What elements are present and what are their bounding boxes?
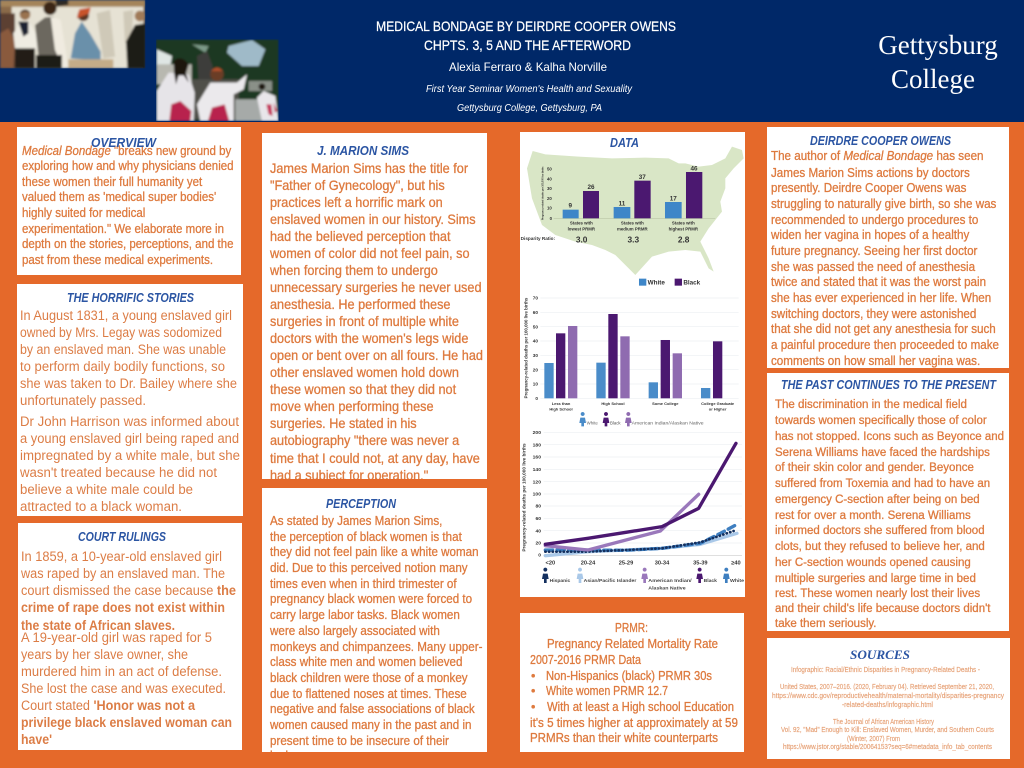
PRMR bullets: • [531,669,535,683]
Sims text: time that I could not, at any day, have [270,451,480,466]
Sims text: had a subject for operation." [270,468,429,483]
PRMR bullets [530,653,738,745]
horrific stories text: unfortunately passed. [20,393,146,408]
chart: PRMR by age: 35-39 [693,560,708,566]
horrific stories text: wasn't treated because he did not [19,465,217,480]
chart: PRMR by state group over US map: highest PRMR [669,227,699,232]
horrific stories text: attracted to a black woman. [20,499,182,514]
panel: data [520,132,745,597]
past continues text: her C-section wounds opened causing [775,556,971,569]
court rulings text: court dismissed the case because the [21,583,236,598]
chart: PRMR by state group over US map: States with [621,221,644,226]
source citations: (Winter, 2007) From [847,734,900,743]
PRMR bullets: With at least a High school Education [547,700,734,714]
past continues text: take them seriously. [775,617,876,630]
court rulings text: have' [21,732,52,747]
court rulings text: Court stated 'Honor was not a [21,698,195,713]
Sims text: women of color did not feel pain, so [269,246,470,261]
chart: PRMR by age: 30-34 [655,560,670,566]
chart: PRMR by education: 50 [533,324,538,329]
Deirdre text: struggling to naturally give birth, so she was [771,197,996,211]
perception text: pregnancy black women were forced to [270,592,472,606]
chart: PRMR by age: Asian/Pacific Islander [584,578,637,583]
chart: PRMR by age: American Indian/ [648,578,693,583]
chart: PRMR by age: 20 [535,541,541,547]
chart: PRMR by state group over US map: 9 [569,203,573,210]
past continues text: clots, but they refused to believe her, and [775,540,985,553]
title [376,18,676,53]
panel: court rulings [18,523,242,750]
horrific stories text: believe a white male could be [20,482,193,497]
court rulings text: privilege black enslaved woman can [21,715,232,730]
past continues text: rest for over a month. Serena Williams [775,509,971,522]
chart: PRMR by age: White [730,578,745,583]
past continues text: and their child's life because doctors didn't [775,602,991,615]
court rulings text: was raped by an enslaved man. The [20,566,225,581]
photo: painting of surgery [0,0,145,68]
perception text: monkeys and chimpanzees. Many upper- [270,640,482,654]
heading: overview: OVERVIEW [91,135,158,150]
Sims text: doctors with the women's legs wide [270,331,468,346]
chart: PRMR by education: Pregnancy-related deaths per 100,000 live births [524,297,529,398]
logo: Gettysburg College: College [891,64,975,94]
Sims text: surgeries in front of multiple white [270,314,459,329]
chart: PRMR by age: Alaskan Native [648,585,686,590]
chart: PRMR by state group over US map: Black [683,279,701,286]
PRMR bullets: 2007-2016 PRMR Data [530,653,641,667]
PRMR definition: Pregnancy Related Mortality Rate [547,637,718,651]
Sims text: unnecessary surgeries he never used [270,280,482,295]
chart: PRMR by education: High School [549,407,573,412]
chart: PRMR by age: ≥40 [731,560,741,566]
Deirdre text: she was passed the need of anesthesia [771,260,975,274]
title: CHPTS. 3, 5 AND THE AFTERWORD [424,37,631,53]
chart: PRMR by age: Black [704,578,718,583]
chart: PRMR by state group over US map: 30 [547,186,552,191]
chart: PRMR by age: 20-24 [581,560,596,566]
panel: J. Marion Sims [258,133,492,488]
perception text: did. Due to this perceived notion many [270,561,468,575]
chart: PRMR by age: 140 [533,467,541,473]
overview text: these women their full humanity yet [22,174,203,189]
court rulings text: A 19-year-old girl was raped for 5 [21,630,212,645]
authors and affiliation: Alexia Ferraro & Kalha Norville [449,60,607,74]
chart: PRMR by education: Black [610,420,621,425]
panel: perception [258,488,492,768]
chart: PRMR by state group over US map: medium PRMR [617,227,648,232]
chart: PRMR by education: 20 [533,367,538,372]
panel: the horrific stories [17,284,243,516]
chart: PRMR by age: 100 [533,492,541,498]
horrific stories text: she was taken to Dr. Bailey where she [20,376,237,391]
chart: PRMR by education: 60 [533,310,538,315]
title: MEDICAL BONDAGE BY DEIRDRE COOPER OWENS [376,18,676,34]
PRMR definition [547,621,718,651]
court rulings text: crime of rape does not exist within [21,600,225,615]
chart: PRMR by age: 180 [533,442,541,448]
heading: sources: SOURCES [850,647,910,662]
PRMR bullets: it's 5 times higher at approximately at 59 [530,716,738,730]
chart: PRMR by state group over US map: 37 [639,174,646,181]
Sims text [269,161,483,483]
perception text: carry large labor tasks. Black women [270,608,460,622]
panel: Deirdre Cooper Owens [767,127,1009,368]
horrific stories text: In August 1831, a young enslaved girl [20,308,232,323]
horrific stories text: impregnated by a white male, but she [20,448,240,463]
Sims text: anesthesia. He performed these [270,297,450,312]
Sims text: autobiography "there was never a [270,433,460,448]
photo: reenactment protest [156,39,279,121]
chart: PRMR by education: Some College [652,401,679,406]
chart: PRMR by state group over US map: 17 [670,195,677,202]
perception text: present time to be insecure of their [270,734,449,748]
court rulings text: In 1859, a 10-year-old enslaved girl [21,549,222,564]
panel: sources [767,638,1010,759]
chart: PRMR by age: Hispanic [550,578,571,583]
chart: PRMR by education: High School [601,401,625,406]
Sims text: when forcing them to undergo [269,263,438,278]
horrific stories text: a young enslaved girl being raped and [20,431,239,446]
source citations [772,665,1004,751]
perception text: the perception of black women is that [270,530,462,544]
chart: PRMR by education: 0 [535,396,538,401]
Sims text: had the believed perception that [270,229,451,244]
PRMR definition: PRMR: [615,621,648,635]
chart: PRMR by state group over US map: 40 [547,176,552,181]
court rulings text: murdered him in an act of defense. [21,664,222,679]
chart: PRMR by state group over US map: Pregnancy-related deaths per 100,000 live births [541,166,544,220]
perception text: they did not feel pain like a white woman [270,545,479,559]
chart: PRMR by education: White [587,420,598,425]
PRMR bullets: PRMRs than their white counterparts [530,731,718,745]
chart: PRMR by education: 10 [533,382,538,387]
overview text: highly suited for medical [22,205,145,220]
chart: PRMR by state group over US map: 3.3 [628,234,639,244]
Sims text: enslaved women in our history. Sims [270,212,476,227]
logo: Gettysburg College [878,30,998,94]
Deirdre text: she has ever experienced in her life. When [771,291,991,305]
past continues text: emergency C-section after being on bed [775,493,980,506]
chart: PRMR by age: 200 [533,430,541,436]
perception text [269,514,482,763]
horrific stories text: to perform daily bodily functions, so [20,359,225,374]
chart: PRMR by age: Pregnancy-related deaths per 100,000 live births [522,443,527,552]
perception text: As stated by James Marion Sims, [270,514,442,528]
heading: J. Marion Sims: J. MARION SIMS [317,143,409,158]
panel: overview [17,127,241,275]
Deirdre text [770,149,999,368]
chart: PRMR by education: Less than [552,401,571,406]
chart: PRMR by age: <20 [546,560,555,566]
past continues text: rest. These women nearly lost their lives [775,587,980,600]
Sims text: these women so that they did not [270,382,456,397]
chart: PRMR by state group over US map: 46 [690,165,698,172]
perception text: negative and false associations of black [270,702,476,716]
source citations: The Journal of African American History [833,717,934,726]
chart: PRMR by state group over US map: 20 [547,196,552,201]
overview text [22,143,234,267]
PRMR bullets: White women PRMR 12.7 [546,684,668,698]
source citations: -related-deaths/infographic.html [842,700,933,709]
chart: PRMR by state group over US map: 50 [547,166,552,171]
panel: PRMR [520,613,744,752]
Deirdre text: The author of Medical Bondage has seen [771,149,983,163]
past continues text: informed doctors she suffered from blood [775,524,985,537]
Deirdre text: presently. Deirdre Cooper Owens was [771,181,966,195]
chart: PRMR by age: 160 [533,455,541,461]
Sims text: other enslaved women hold down [270,365,459,380]
chart: PRMR by state group over US map: 3.0 [576,234,588,244]
Deirdre text: switching doctors, they were astonished [771,307,976,321]
Sims text: "Father of Gynecology", but his [270,178,445,193]
Sims text: James Marion Sims has the title for [270,161,469,176]
Sims text: move when performing these [270,399,434,414]
Sims text: practices left a horrific mark on [270,195,443,210]
horrific stories text [19,308,240,514]
perception text: were also largely associated with [269,624,440,638]
horrific stories text: owned by Mrs. Legay was sodomized [20,325,222,340]
Deirdre text: twice and stated that it was the worst pain [771,275,986,289]
perception text: looks. [270,749,300,763]
past continues text: of their skin color and gender. Beyonce [775,461,974,474]
chart: PRMR by education [524,296,739,426]
court rulings text: the state of African slaves. [21,618,175,633]
logo: Gettysburg College: Gettysburg [878,30,998,60]
heading: court rulings: COURT RULINGS [78,529,166,544]
perception text: women caused many in the past and in [269,718,471,732]
Deirdre text: recommended to undergo procedures to [771,213,979,227]
past continues text: Serena Williams have faced the hardships [775,446,990,459]
chart: PRMR by age: 80 [535,504,541,510]
chart: PRMR by state group over US map: 2.8 [678,234,690,244]
past continues text: suffered from Toxemia and had to have an [775,477,990,490]
source citations: https://www.jstor.org/stable/20064153?seq=6#metadata_info_tab_contents [783,742,992,751]
perception text: black children were those of a monkey [270,671,468,685]
chart: PRMR by education: 40 [533,339,538,344]
Deirdre text: James Marion Sims actions by doctors [771,166,970,180]
chart: PRMR by age: 25-29 [619,560,633,566]
heading: Deirdre Cooper Owens: DEIRDRE COOPER OWENS [810,133,951,148]
chart: PRMR by state group over US map: 10 [547,206,552,211]
overview text: exploring how and why physicians denied [22,158,234,173]
chart: PRMR by age: 40 [535,528,541,534]
chart: PRMR by state group over US map: 0 [550,216,553,221]
Sims text: open or bent over on all fours. He had [270,348,483,363]
Deirdre text: that she did not get any anesthesia for such [771,322,996,336]
PRMR bullets: Non-Hispanics (black) PRMR 30s [546,669,712,683]
chart: PRMR by state group over US map: White [648,279,665,286]
court rulings text: years by her slave owner, she [21,647,188,662]
Deirdre text: widen her vagina in hopes of a healthy [770,228,969,242]
Deirdre text: future pregnancy. Seeing her first doctor [771,244,977,258]
chart: PRMR by age: 0 [538,553,541,559]
court rulings text: She lost the case and was executed. [21,681,226,696]
authors and affiliation: First Year Seminar Women's Health and Sexuality [426,84,633,95]
overview text: Medical Bondage "breaks new ground by [22,143,232,158]
PRMR bullets: • [531,700,535,714]
perception text: times even when in third trimester of [270,577,457,591]
chart: PRMR by state group over US map: 26 [587,184,595,191]
overview text: valued them as 'medical super bodies' [22,189,216,204]
horrific stories text: by an enslaved man. She was unable [20,342,226,357]
chart: PRMR by education: or Higher [709,407,727,412]
Sims text: surgeries. He stated in his [270,416,417,431]
heading: data: DATA [610,135,639,150]
overview text: past from these medical experiments. [22,252,213,267]
overview text: experimentation." We elaborate more in [22,221,224,236]
authors and affiliation: Gettysburg College, Gettysburg, PA [457,103,602,114]
past continues text: The discrimination in the medical field [775,398,967,411]
heading: perception: PERCEPTION [326,496,397,511]
court rulings text [20,549,236,747]
perception text: due to flattened noses at times. These [270,687,467,701]
chart: PRMR by education: College Graduate [701,401,735,406]
chart: PRMR by state group over US map: States with [672,221,695,226]
chart: PRMR by state group over US map: lowest PRMR [568,227,596,232]
chart: PRMR by state group over US map: Disparity Ratio: [521,236,556,241]
chart: PRMR by state group over US map [521,147,744,286]
past continues text: has not stopped. Icons such as Beyonce and [775,430,1004,443]
chart: PRMR by age [522,430,745,590]
chart: PRMR by education: 70 [533,296,538,301]
authors and affiliation [426,60,633,114]
past continues text: towards women specifically those of color [775,414,987,427]
chart: PRMR by education: American Indian/Alaskan Native [632,420,704,425]
heading: horrific stories: THE HORRIFIC STORIES [67,290,194,305]
past continues text: multiple surgeries and large time in bed [775,572,976,585]
chart: PRMR by education: 30 [533,353,538,358]
chart: PRMR by state group over US map: States with [570,221,593,226]
Deirdre text: a painful procedure then proceeded to make [771,338,999,352]
chart: PRMR by age: 120 [533,479,541,485]
overview text: depth on the stories, perceptions, and the [22,236,234,251]
PRMR bullets: • [531,684,535,698]
header banner [0,0,1024,122]
chart: PRMR by age: 60 [535,516,541,522]
source citations: Infographic: Racial/Ethnic Disparities in Pregnancy-Related Deaths - [791,665,980,674]
horrific stories text: Dr John Harrison was informed about [20,414,239,429]
Deirdre text: comments on how small her vagina was. [771,354,980,368]
perception text: class white men and women believed [270,655,462,669]
past continues text [775,398,1004,630]
panel: the past continues to the present [767,373,1009,631]
chart: PRMR by state group over US map: 11 [619,200,626,207]
